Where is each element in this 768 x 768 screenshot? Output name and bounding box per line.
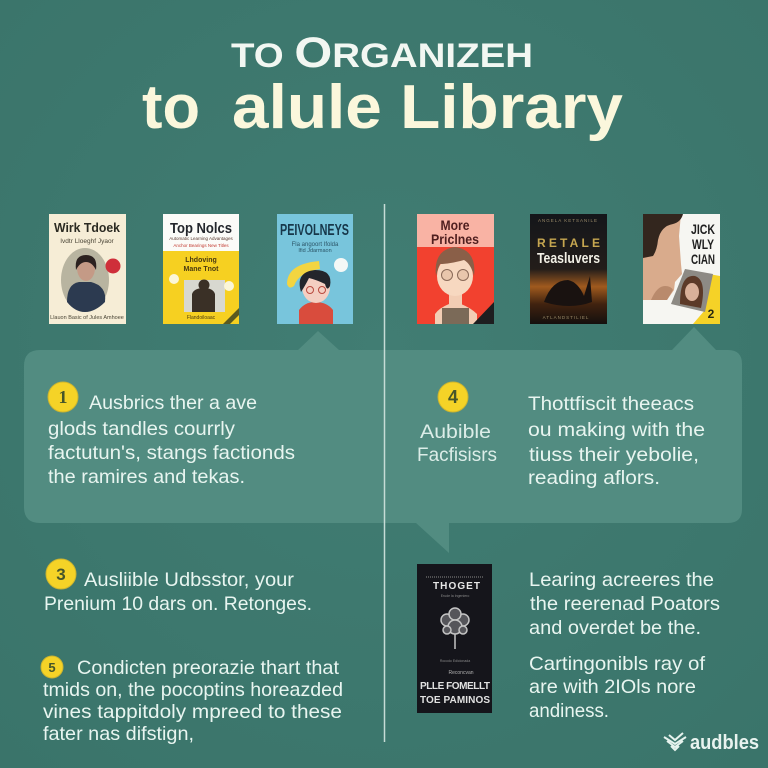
title line 1: TO ORGANIZEH [231, 29, 533, 77]
book: Retale Teasluvers [530, 214, 607, 324]
book: Thoget: PLLE FOMELLT [420, 681, 490, 692]
book: Jick Wly Cian [643, 214, 720, 324]
book: More Priclnes: Priclnes [431, 231, 479, 247]
book: Peivolneys: Ifid Jdarmaon [298, 248, 332, 254]
title line 2: to [142, 73, 200, 142]
paragraph 4: ou making with the [528, 419, 705, 441]
paragraph 4 [528, 393, 705, 489]
badge 4 [438, 382, 468, 412]
book: Thoget [417, 564, 492, 713]
book: Wirk Tdoek [49, 214, 126, 324]
badge 1 [48, 382, 78, 412]
paragraph: right lower 2 [529, 653, 706, 722]
paragraph 4: Thottfiscit theeacs [528, 393, 694, 415]
paragraph 3 [44, 569, 312, 615]
paragraph 3: Prenium 10 dars on. Retonges. [44, 593, 312, 615]
label: Aubible Facfisisrs [417, 421, 497, 466]
label: Aubible Facfisisrs: Facfisisrs [417, 444, 497, 466]
badge 4: 4 [448, 387, 458, 407]
label: Aubible Facfisisrs: Aubible [420, 421, 491, 443]
book: Top Nolcs: Flandoiloaac [187, 315, 216, 321]
icon: logo mark [664, 733, 686, 750]
paragraph 4: reading aflors. [528, 467, 660, 489]
book: Peivolneys: Fla angoort Ifolda [292, 242, 339, 248]
paragraph: right lower 2: are with 2IOls nore [529, 676, 696, 698]
logo wordmark: audbles [690, 732, 759, 754]
logo: audbles [664, 732, 759, 754]
book: Top Nolcs: Mane Tnot [184, 266, 219, 273]
book: Retale Teasluvers: ANGELA KETSANILE [538, 218, 598, 223]
paragraph: right lower 1: and overdet be the. [529, 617, 701, 639]
paragraph 5 [43, 657, 343, 745]
book: Thoget: Erude la Ingeniero [441, 594, 469, 598]
paragraph: right lower 2: andiness. [529, 700, 609, 722]
book: Thoget: Rocodo Edicionada [440, 659, 470, 663]
book: Peivolneys [277, 214, 353, 324]
paragraph: right lower 1: Learing acreeres the [529, 569, 714, 591]
title line 2: alule Library [232, 73, 624, 142]
book: Thoget: THOGET [433, 581, 480, 592]
paragraph 3: Ausliible Udbsstor, your [84, 569, 295, 591]
paragraph 1 [48, 392, 295, 488]
book: Wirk Tdoek: Ivdtr Lloeghf Jyaor [60, 238, 115, 245]
book: Thoget: TOE PAMINOS [420, 695, 490, 706]
book: Wirk Tdoek: Llauon Basic of Jules Amhoee [50, 315, 124, 321]
book: Jick Wly Cian: 2 [708, 307, 715, 321]
book: Retale Teasluvers: RETALE [537, 236, 600, 250]
badge 3 [46, 559, 76, 589]
book: Top Nolcs: Anchor Bearings New Titles [173, 243, 229, 248]
book: Wirk Tdoek: Wirk Tdoek [54, 220, 121, 235]
paragraph 1: Ausbrics ther a ave [89, 392, 257, 414]
book: Retale Teasluvers: ATLANDSTILIEL [543, 315, 589, 320]
paragraph 1: glods tandles courrly [48, 418, 235, 440]
badge 5 [41, 656, 63, 678]
book: Top Nolcs [163, 214, 239, 324]
paragraph: right lower 1 [529, 569, 720, 639]
book: More Priclnes: More [440, 217, 470, 233]
paragraph: right lower 2: Cartingonibls ray of [529, 653, 706, 675]
paragraph 1: factutun's, stangs factionds [48, 442, 295, 464]
paragraph 5: vines tappitdoly mpreed to these [43, 701, 342, 723]
paragraph 5: tmids on, the pocoptins horeazded [43, 679, 343, 701]
paragraph 1: the ramires and tekas. [48, 466, 245, 488]
badge 1: 1 [58, 387, 68, 407]
book: Top Nolcs: Lhdoving [185, 257, 217, 264]
paragraph 5: Condicten preorazie thart that [77, 657, 340, 679]
paragraph: right lower 1: the reerenad Poators [530, 593, 720, 615]
badge 3: 3 [56, 565, 66, 584]
book: More Priclnes [417, 214, 494, 324]
badge 5: 5 [48, 660, 56, 675]
paragraph 4: tiuss their yebolie, [529, 444, 699, 466]
book: Top Nolcs: Automatic Learning Advantages [169, 236, 234, 241]
paragraph 5: fater nas difstign, [43, 723, 194, 745]
book: Thoget: Reconcvan [448, 670, 474, 676]
